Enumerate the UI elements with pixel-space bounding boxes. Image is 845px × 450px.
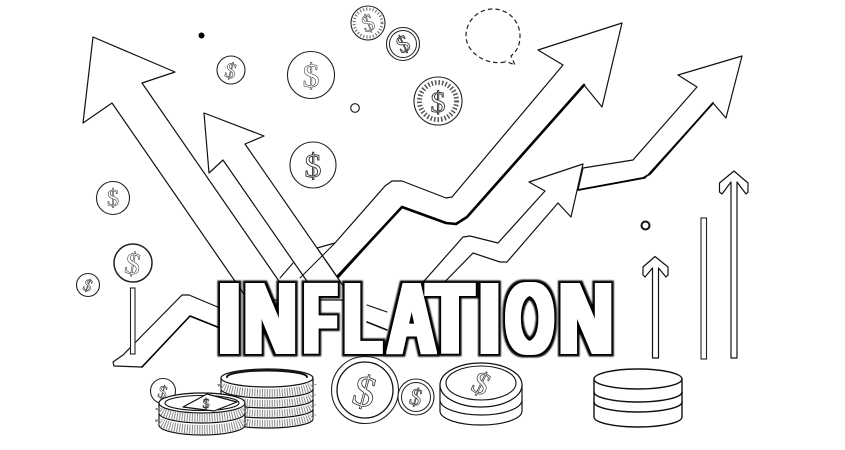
arrow: front small rising arrow [410,164,583,297]
coin: left medium [96,182,130,214]
coin: left medium: $ [107,186,119,212]
coin stack: right with dollar [440,363,522,425]
title: I [478,263,499,375]
title: L [344,263,381,375]
title: N [559,263,612,375]
coin: far left small [76,274,100,296]
coin: bottom large double rim: $ [348,365,382,418]
title: T [427,263,474,375]
coin: top textured [351,6,385,40]
coin: top small: $ [222,57,239,84]
coin: left bold [114,244,152,282]
icon: left stick bar [130,288,135,354]
coin: far left small: $ [81,275,95,296]
coin: textured with lettering rim [414,77,462,125]
title [216,263,615,375]
arrow: short vertical [643,256,668,358]
coin: top large: $ [302,58,320,95]
title: I [218,263,241,375]
title: A [388,263,435,375]
arrow: large upward-left arrow [83,37,292,300]
dot: open bold [642,222,650,230]
arrow: low rising arrow tail behind title [113,295,387,367]
dot: solid [198,32,204,38]
title: N [244,263,296,375]
coin: left bold: $ [122,245,144,282]
arrow: main rising arrow with thick lower edge [317,23,622,278]
coin: middle large [290,142,336,188]
coin: top textured: $ [358,10,378,38]
coin: bottom small behind stack [150,378,176,404]
coin stack: front ridged with banknote: $ [202,397,210,412]
title: O [506,263,554,375]
coin: top small [217,56,245,84]
title: F [304,263,336,375]
coin: bottom small behind stack: $ [156,381,170,403]
speech bubble: dashed [466,9,520,65]
coin: bottom small double rim [398,379,434,415]
coin: textured with lettering rim: $ [430,86,446,119]
arrow: tail lines of main arrow crossing behind title [280,243,335,278]
dot: open small [351,104,359,112]
coin: bottom small double rim: $ [407,384,425,412]
coin stack: right with dollar: $ [467,363,496,403]
arrow: rising back right arrow [578,56,742,190]
coin: bottom large double rim [332,356,398,424]
coin: top double rim: $ [392,31,414,59]
coin stack: front ridged with banknote [159,393,245,435]
coin: top double rim [386,28,420,60]
coin: top large [288,52,334,98]
coin stack: back ridged [221,369,313,428]
arrow: second upward-left arrow [204,113,353,300]
arrow: tall vertical [720,171,748,358]
coin stack: plain right [594,369,682,427]
coin: middle large: $ [304,148,322,185]
bar: vertical [701,218,706,359]
